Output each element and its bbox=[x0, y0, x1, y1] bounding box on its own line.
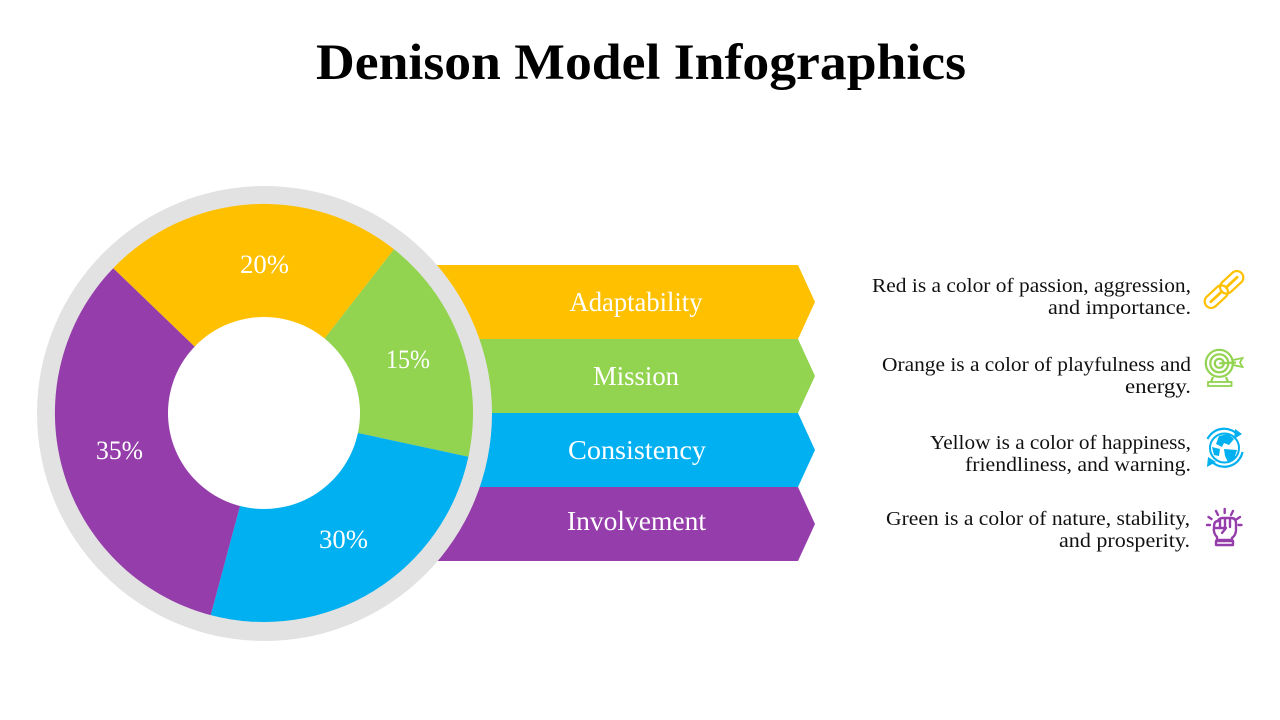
text: red description: and importance. bbox=[1048, 297, 1191, 319]
text: yellow description: Yellow is a color of happiness, bbox=[930, 432, 1191, 454]
text: red description bbox=[872, 275, 1191, 319]
title: Denison Model Infographics bbox=[316, 35, 966, 91]
outer ring bbox=[37, 186, 492, 641]
icon: chain link bbox=[1202, 268, 1246, 311]
text: green description bbox=[886, 508, 1190, 552]
icon: raised fist bbox=[1207, 509, 1242, 545]
text: orange description: Orange is a color of playfulness and bbox=[882, 354, 1191, 376]
segment: 15% green bbox=[264, 249, 473, 457]
banner: Adaptability: Adaptability bbox=[570, 287, 703, 317]
text: green description: Green is a color of nature, stability, bbox=[886, 508, 1190, 530]
banner: Adaptability bbox=[420, 265, 815, 339]
text: yellow description bbox=[930, 432, 1191, 476]
banner: Consistency: Consistency bbox=[568, 435, 707, 465]
label: 20%: 20% bbox=[240, 250, 289, 279]
chevron banners bbox=[420, 265, 815, 561]
banner: Consistency bbox=[420, 413, 815, 487]
donut chart bbox=[37, 186, 492, 641]
label: 30%: 30% bbox=[319, 525, 368, 554]
text: red description: Red is a color of passion, aggression, bbox=[872, 275, 1191, 297]
icon: globe with arrows bbox=[1207, 429, 1242, 467]
text: yellow description: friendliness, and warning. bbox=[965, 454, 1191, 476]
banner: Involvement bbox=[420, 487, 815, 561]
banner: Involvement: Involvement bbox=[567, 506, 707, 536]
label: 35%: 35% bbox=[96, 436, 143, 465]
text: orange description: energy. bbox=[1125, 376, 1191, 398]
banner: Mission: Mission bbox=[593, 361, 679, 391]
icon: target with arrow bbox=[1206, 350, 1242, 386]
label: 15%: 15% bbox=[386, 345, 430, 374]
text: green description: and prosperity. bbox=[1059, 530, 1190, 552]
banner: Mission bbox=[420, 339, 815, 413]
segment: 35% purple bbox=[55, 268, 264, 615]
segment: 20% yellow bbox=[113, 204, 394, 347]
text: orange description bbox=[882, 354, 1191, 398]
segment: 30% blue bbox=[211, 413, 468, 622]
donut hole bbox=[168, 317, 360, 509]
